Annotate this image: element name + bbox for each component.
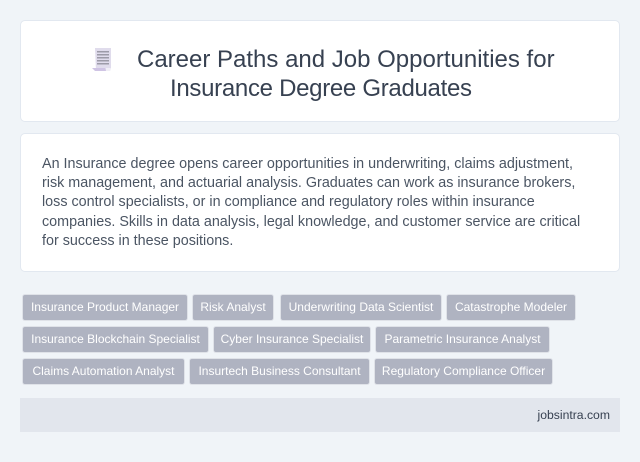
tag xyxy=(23,327,208,352)
tag xyxy=(193,295,273,320)
tag xyxy=(190,359,369,384)
tag xyxy=(375,359,552,384)
description text: risk management, and actuarial analysis. Graduates can work as insurance brokers, xyxy=(42,175,575,191)
description text xyxy=(42,156,580,249)
panel: title card xyxy=(20,20,620,122)
tag xyxy=(214,327,370,352)
title: Insurance Degree Graduates xyxy=(170,75,472,102)
panel: description card xyxy=(20,133,620,272)
tag: Insurance Product Manager xyxy=(31,300,179,314)
tag xyxy=(23,295,187,320)
description text: loss control specialists, or in compliance and regulatory roles within insurance xyxy=(42,194,535,210)
description text: companies. Skills in data analysis, legal knowledge, and customer service are critical xyxy=(42,214,580,230)
tag: Claims Automation Analyst xyxy=(32,364,175,378)
tag xyxy=(447,295,575,320)
description text: for success in these positions. xyxy=(42,233,233,249)
footer source text: jobsintra.com xyxy=(538,408,610,422)
tag: Insurtech Business Consultant xyxy=(198,364,361,378)
panel: career tags xyxy=(22,294,576,385)
tag: Catastrophe Modeler xyxy=(455,300,567,314)
tag: Parametric Insurance Analyst xyxy=(384,332,541,346)
footer bar xyxy=(20,398,620,432)
tag xyxy=(23,359,184,384)
tag: Regulatory Compliance Officer xyxy=(382,364,545,378)
tag xyxy=(281,295,441,320)
icon: document scroll xyxy=(92,48,111,71)
tag: Insurance Blockchain Specialist xyxy=(31,332,200,346)
tag: Cyber Insurance Specialist xyxy=(221,332,363,346)
tag xyxy=(376,327,549,352)
tag: Risk Analyst xyxy=(200,300,266,314)
title: Career Paths and Job Opportunities for xyxy=(137,46,555,73)
title xyxy=(137,46,555,102)
tag: Underwriting Data Scientist xyxy=(289,300,433,314)
description text: An Insurance degree opens career opportunities in underwriting, claims adjustment, xyxy=(42,156,573,172)
